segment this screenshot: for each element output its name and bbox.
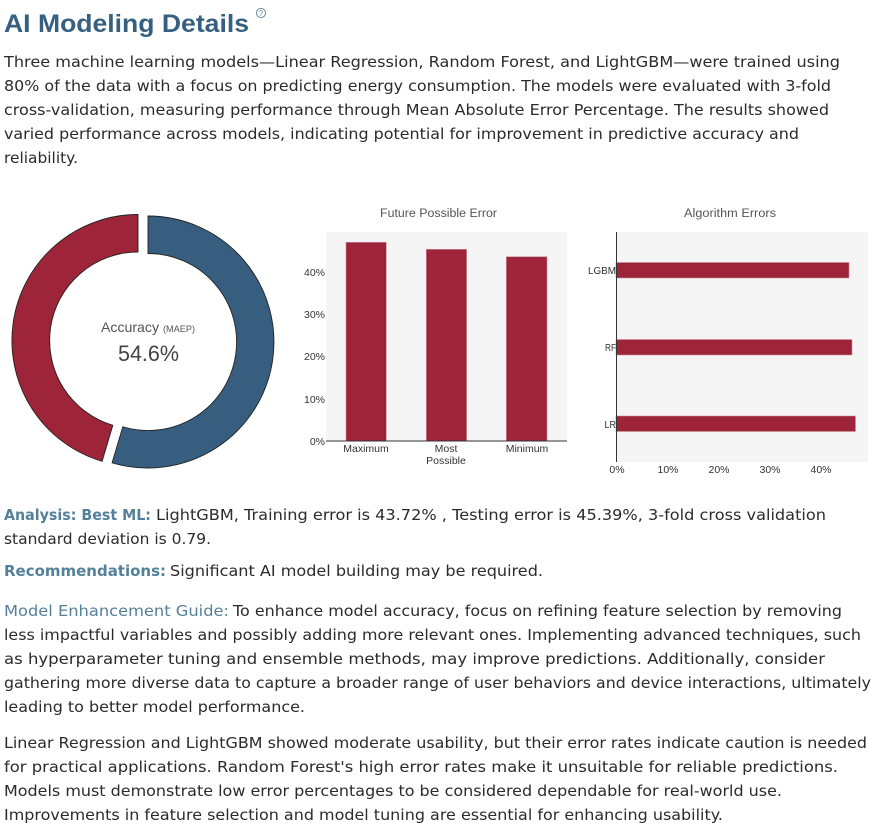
model enhancement guide text: To enhance model accuracy, focus on refining feature selection by removing — [232, 602, 842, 620]
intro text block: 80% of the data with a focus on predicting energy consumption. The models were evaluated with 3-fold — [4, 77, 831, 95]
model enhancement guide text: Model Enhancement Guide: — [4, 602, 229, 620]
intro text block — [3, 53, 840, 167]
recommendations text — [4, 562, 543, 580]
x axis labels — [343, 443, 549, 467]
x axis labels — [609, 464, 832, 476]
donut centre label: (MAEP) — [163, 324, 195, 335]
x axis labels: 40% — [810, 464, 832, 476]
y axis labels: LGBM — [588, 265, 616, 277]
x axis labels: 10% — [657, 464, 679, 476]
usability text block: Models must demonstrate low error percentages to be considered dependable for real-world use. — [4, 782, 782, 800]
usability text block — [4, 734, 867, 824]
x axis labels: Maximum — [343, 443, 389, 455]
icon: help — [256, 8, 266, 18]
y axis labels: RF — [605, 342, 616, 354]
y axis labels: 30% — [304, 309, 325, 321]
usability text block: Linear Regression and LightGBM showed moderate usability, but their error rates indicate caution is needed — [4, 734, 867, 752]
donut slice: error — [12, 214, 138, 461]
intro text block: cross-validation, measuring performance through Mean Absolute Error Percentage. The results showed — [4, 101, 829, 119]
donut chart: accuracy — [12, 214, 274, 468]
bar: RF — [616, 340, 852, 355]
intro text block: Three machine learning models—Linear Regression, Random Forest, and LightGBM—were trained using — [3, 53, 840, 71]
analysis text: standard deviation is 0.79. — [4, 530, 211, 548]
x axis labels: 30% — [759, 464, 781, 476]
y axis labels — [588, 265, 616, 431]
analysis text: LightGBM, Training error is 43.72% , Testing error is 45.39%, 3-fold cross validation — [156, 506, 826, 524]
x axis labels: Possible — [426, 455, 466, 467]
recommendations text: Recommendations: — [4, 562, 166, 580]
bar chart: future possible error — [304, 208, 567, 467]
x axis labels: 0% — [609, 464, 625, 476]
donut centre label — [101, 319, 195, 366]
bar chart: algorithm errors — [588, 208, 868, 476]
y axis labels: 0% — [310, 436, 325, 448]
bar: maximum — [346, 242, 386, 441]
bar: LR — [616, 416, 856, 432]
x axis labels: Minimum — [506, 443, 549, 455]
y axis labels: LR — [604, 419, 616, 431]
donut slice: accuracy — [112, 216, 274, 468]
chart title: Algorithm Errors — [684, 208, 776, 220]
icon: help: ? — [259, 9, 264, 18]
bar: LGBM — [616, 262, 849, 278]
bar: minimum — [506, 257, 547, 441]
x axis labels: 20% — [708, 464, 730, 476]
usability text block: Improvements in feature selection and model tuning are essential for enhancing usability. — [4, 806, 723, 824]
x axis labels: Most — [435, 443, 457, 455]
recommendations text: Significant AI model building may be required. — [170, 562, 543, 580]
model enhancement guide text: as hyperparameter tuning and ensemble methods, may improve predictions. Additionally, consider — [4, 650, 826, 668]
model enhancement guide text: leading to better model performance. — [4, 698, 305, 716]
intro text block: varied performance across models, indicating potential for improvement in predictive accuracy and — [4, 125, 799, 143]
model enhancement guide text: less impactful variables and possibly adding more relevant ones. Implementing advanced techniques, such — [4, 626, 861, 644]
analysis text: Analysis: Best ML: — [4, 506, 151, 524]
analysis text — [4, 506, 826, 548]
y axis labels: 40% — [304, 267, 325, 279]
usability text block: for practical applications. Random Forest's high error rates make it unsuitable for reliable predictions. — [4, 758, 838, 776]
y axis labels — [304, 267, 325, 448]
y axis labels: 10% — [304, 394, 325, 406]
model enhancement guide text: gathering more diverse data to capture a broader range of user behaviors and device interactions, ultimately — [4, 674, 871, 692]
chart title: Future Possible Error — [380, 208, 497, 220]
donut centre label: 54.6% — [118, 341, 179, 366]
donut centre label: Accuracy — [101, 319, 159, 335]
heading: AI Modeling Details — [4, 10, 249, 38]
model enhancement guide text — [4, 602, 871, 716]
intro text block: reliability. — [4, 149, 78, 167]
bar: most possible — [426, 249, 467, 441]
y axis labels: 20% — [304, 351, 325, 363]
